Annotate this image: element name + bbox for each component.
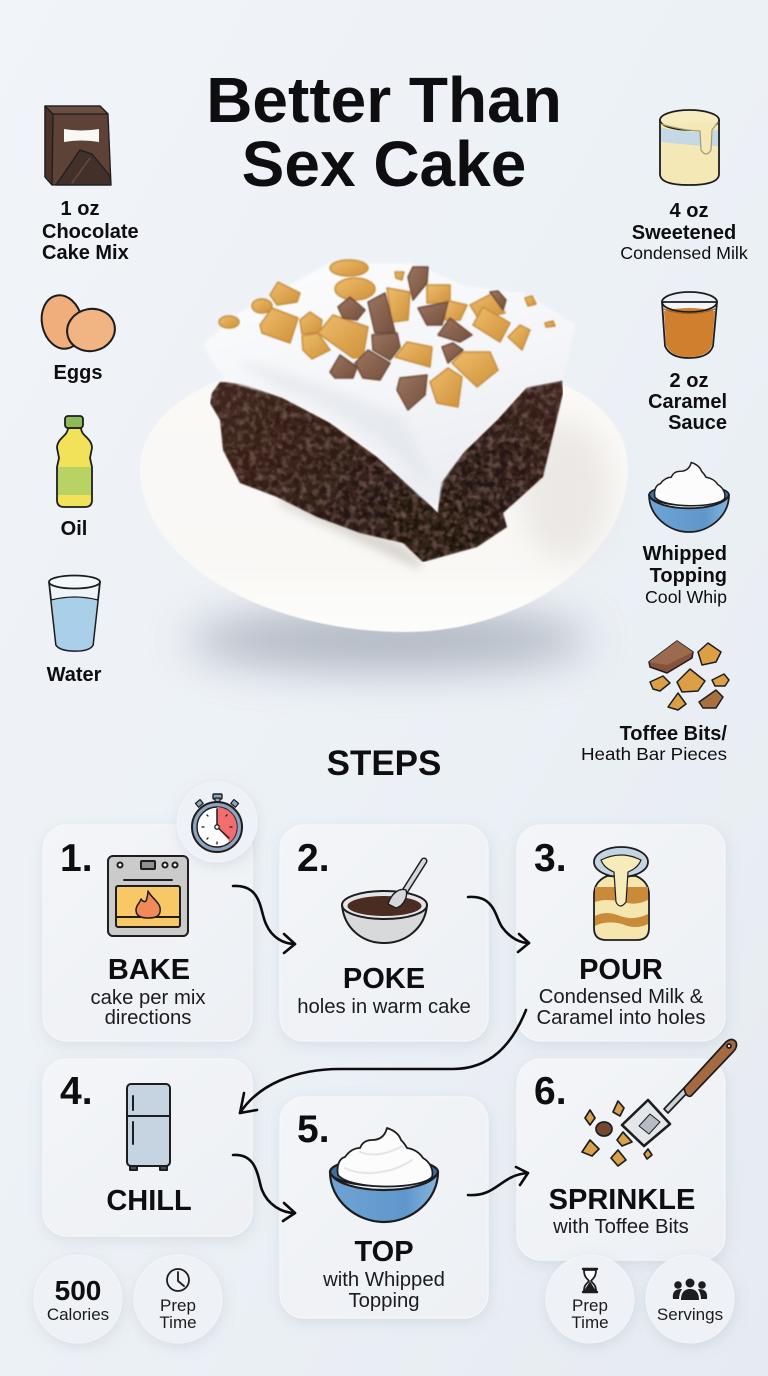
ingredient: caramel sauce: Caramel bbox=[648, 391, 727, 413]
ingredient: eggs: Eggs bbox=[54, 362, 102, 384]
plate bbox=[140, 361, 628, 632]
step description: with Whipped bbox=[322, 1269, 445, 1291]
hero: cake slice on plate bbox=[140, 260, 628, 670]
stat: prep time hourglass: Time bbox=[571, 1313, 609, 1332]
arrow: step 1 to 2 bbox=[233, 886, 295, 953]
arrow: step 3 to 4 bbox=[240, 1010, 526, 1113]
panel: step 1 bake bbox=[43, 825, 252, 1041]
panel: step 3 pour: Caramel into holes bbox=[536, 1007, 706, 1029]
stat: servings bbox=[646, 1255, 734, 1343]
ingredient: condensed milk: Condensed Milk bbox=[620, 243, 748, 263]
panel: step 3 pour bbox=[517, 825, 725, 1041]
icon: bowl with spoon bbox=[342, 861, 427, 943]
icon: clock bbox=[167, 1269, 189, 1291]
stat: prep time clock: Time bbox=[159, 1313, 197, 1332]
ingredient: oil bbox=[57, 416, 92, 540]
title: Sex Cake bbox=[242, 128, 526, 200]
icon: two eggs bbox=[37, 291, 119, 356]
icon: oven bbox=[108, 856, 188, 936]
icon: oil bottle bbox=[57, 416, 92, 507]
whipped topping bbox=[207, 266, 572, 503]
ingredient: caramel sauce: 2 oz bbox=[670, 370, 708, 392]
panel: step 1 bake: directions bbox=[105, 1007, 191, 1029]
icon: spatula with toffee bbox=[582, 1040, 737, 1166]
step description: holes in warm cake bbox=[297, 996, 471, 1018]
step number: 1. bbox=[60, 837, 93, 880]
icon: glass of water bbox=[49, 576, 100, 651]
stat: prep time clock bbox=[134, 1255, 222, 1343]
panel: step 6 sprinkle bbox=[517, 1040, 737, 1260]
ingredient: water: Water bbox=[47, 664, 102, 686]
step title: CHILL bbox=[106, 1185, 192, 1217]
step title: BAKE bbox=[108, 954, 190, 986]
ingredient: toffee bits: Toffee Bits/ bbox=[620, 723, 727, 745]
icon: glass of caramel bbox=[662, 292, 717, 358]
step number: 4. bbox=[60, 1070, 93, 1113]
panel: step 5 top: Topping bbox=[348, 1290, 420, 1312]
step description: with Toffee Bits bbox=[552, 1216, 689, 1238]
icon: condensed milk can bbox=[660, 110, 719, 185]
ingredient: caramel sauce bbox=[648, 292, 727, 434]
icon: fridge bbox=[127, 1084, 170, 1170]
icon: stopwatch bbox=[192, 794, 242, 852]
ingredient: chocolate cake mix: 1 oz bbox=[61, 198, 99, 220]
icon: cake mix box bbox=[45, 106, 111, 185]
stat: prep time clock: Prep bbox=[160, 1296, 196, 1315]
step title: TOP bbox=[354, 1236, 414, 1268]
ingredient: whipped topping: Cool Whip bbox=[645, 587, 727, 607]
stat: prep time hourglass bbox=[546, 1255, 634, 1343]
icon: hourglass bbox=[583, 1269, 597, 1292]
ingredient: whipped topping: Whipped bbox=[643, 543, 727, 565]
icon: jar with pouring milk bbox=[594, 847, 649, 940]
icon: toffee and chocolate pieces bbox=[649, 641, 729, 710]
step description: cake per mix bbox=[91, 987, 205, 1009]
cake sponge bbox=[210, 380, 563, 562]
stat: calories bbox=[34, 1255, 122, 1343]
arrow: step 4 to 5 bbox=[233, 1155, 295, 1221]
ingredient: oil: Oil bbox=[61, 518, 87, 540]
arrow: step 5 to 6 bbox=[468, 1167, 528, 1195]
title bbox=[206, 64, 562, 200]
stat: prep time hourglass: Prep bbox=[572, 1296, 608, 1315]
step number: 6. bbox=[534, 1070, 567, 1113]
icon: bowl of whipped topping bbox=[649, 462, 729, 532]
ingredient: chocolate cake mix bbox=[42, 106, 139, 264]
stat: servings: Servings bbox=[657, 1305, 723, 1324]
ingredient: water bbox=[47, 576, 102, 686]
step title: POUR bbox=[579, 954, 663, 986]
icon: people bbox=[673, 1278, 707, 1300]
ingredient: chocolate cake mix: Chocolate bbox=[42, 221, 139, 243]
ingredient: chocolate cake mix: Cake Mix bbox=[42, 242, 129, 264]
step title: POKE bbox=[343, 963, 425, 995]
heading: steps: STEPS bbox=[327, 744, 441, 783]
stat: calories: 500 bbox=[55, 1275, 101, 1306]
plate shadow bbox=[188, 610, 588, 670]
step number: 5. bbox=[297, 1108, 330, 1151]
title: Better Than bbox=[206, 64, 562, 136]
badge: stopwatch bbox=[177, 782, 257, 862]
step title: SPRINKLE bbox=[549, 1184, 695, 1216]
ingredient: toffee bits: Heath Bar Pieces bbox=[581, 744, 727, 764]
icon: bowl of whipped topping bbox=[330, 1128, 438, 1222]
ingredient: condensed milk bbox=[620, 110, 748, 263]
ingredient: condensed milk: 4 oz bbox=[670, 200, 708, 222]
ingredient: condensed milk: Sweetened bbox=[632, 222, 736, 244]
ingredient: whipped topping bbox=[643, 462, 729, 607]
panel: step 2 poke bbox=[280, 825, 488, 1041]
step description: Condensed Milk & bbox=[539, 986, 704, 1008]
toffee and chocolate pieces bbox=[219, 260, 555, 410]
step number: 3. bbox=[534, 837, 567, 880]
stat: calories: Calories bbox=[47, 1305, 109, 1324]
arrow: step 2 to 3 bbox=[468, 897, 529, 952]
ingredient: eggs bbox=[37, 291, 119, 384]
ingredient: whipped topping: Topping bbox=[650, 565, 727, 587]
panel: step 5 top bbox=[280, 1097, 488, 1318]
ingredient: toffee bits bbox=[581, 641, 729, 764]
step number: 2. bbox=[297, 837, 330, 880]
ingredient: caramel sauce: Sauce bbox=[668, 412, 727, 434]
frosting shading bbox=[235, 360, 432, 490]
panel: step 4 chill bbox=[43, 1059, 252, 1236]
